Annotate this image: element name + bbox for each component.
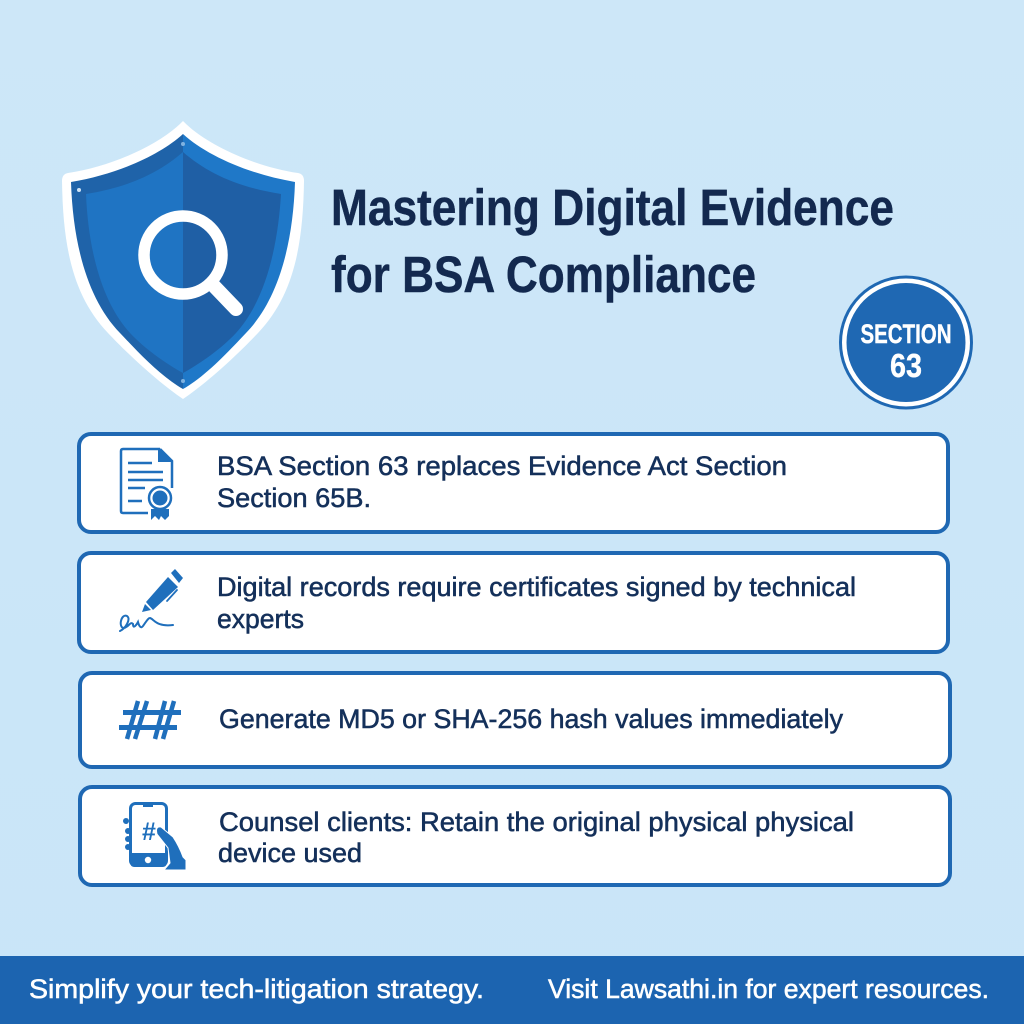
icon: phone with hash and hand: # bbox=[142, 818, 156, 846]
text: digital records: Digital records require certificates signed by technical bbox=[217, 572, 856, 602]
card 1: BSA section bbox=[79, 434, 948, 532]
text: generate hash: Generate MD5 or SHA-256 hash values immediately bbox=[219, 704, 843, 734]
text: section 63 replaces bbox=[217, 451, 787, 513]
text: counsel clients: device used bbox=[218, 838, 362, 868]
card 2: digital records bbox=[79, 553, 948, 652]
text: section 63 replaces: Section 65B. bbox=[217, 483, 371, 513]
icon: certificate bbox=[121, 448, 172, 520]
text: section 63 replaces: BSA Section 63 replaces Evidence Act Section bbox=[217, 451, 787, 481]
title bbox=[331, 179, 894, 303]
badge: section 63 bbox=[839, 276, 973, 410]
footer bar bbox=[0, 956, 1024, 1024]
title: for BSA Compliance bbox=[331, 246, 756, 303]
text: counsel clients bbox=[218, 807, 854, 868]
icon: hash symbols bbox=[119, 701, 181, 739]
footer text right: Visit Lawsathi.in for expert resources. bbox=[548, 974, 989, 1004]
icon: phone with hash and hand bbox=[123, 804, 186, 870]
text: digital records bbox=[217, 572, 856, 634]
text: counsel clients: Counsel clients: Retain the original physical physical bbox=[219, 807, 854, 837]
badge: section 63: SECTION bbox=[860, 319, 952, 349]
badge: section 63: 63 bbox=[890, 347, 922, 384]
card 3: hash values bbox=[80, 673, 950, 767]
icon: shield with magnifying glass bbox=[62, 121, 304, 399]
title: Mastering Digital Evidence bbox=[331, 179, 894, 236]
footer text left: Simplify your tech-litigation strategy. bbox=[29, 974, 484, 1004]
icon: pen signature bbox=[120, 569, 183, 631]
text: digital records: experts bbox=[217, 604, 304, 634]
card 4: counsel clients bbox=[80, 787, 950, 885]
